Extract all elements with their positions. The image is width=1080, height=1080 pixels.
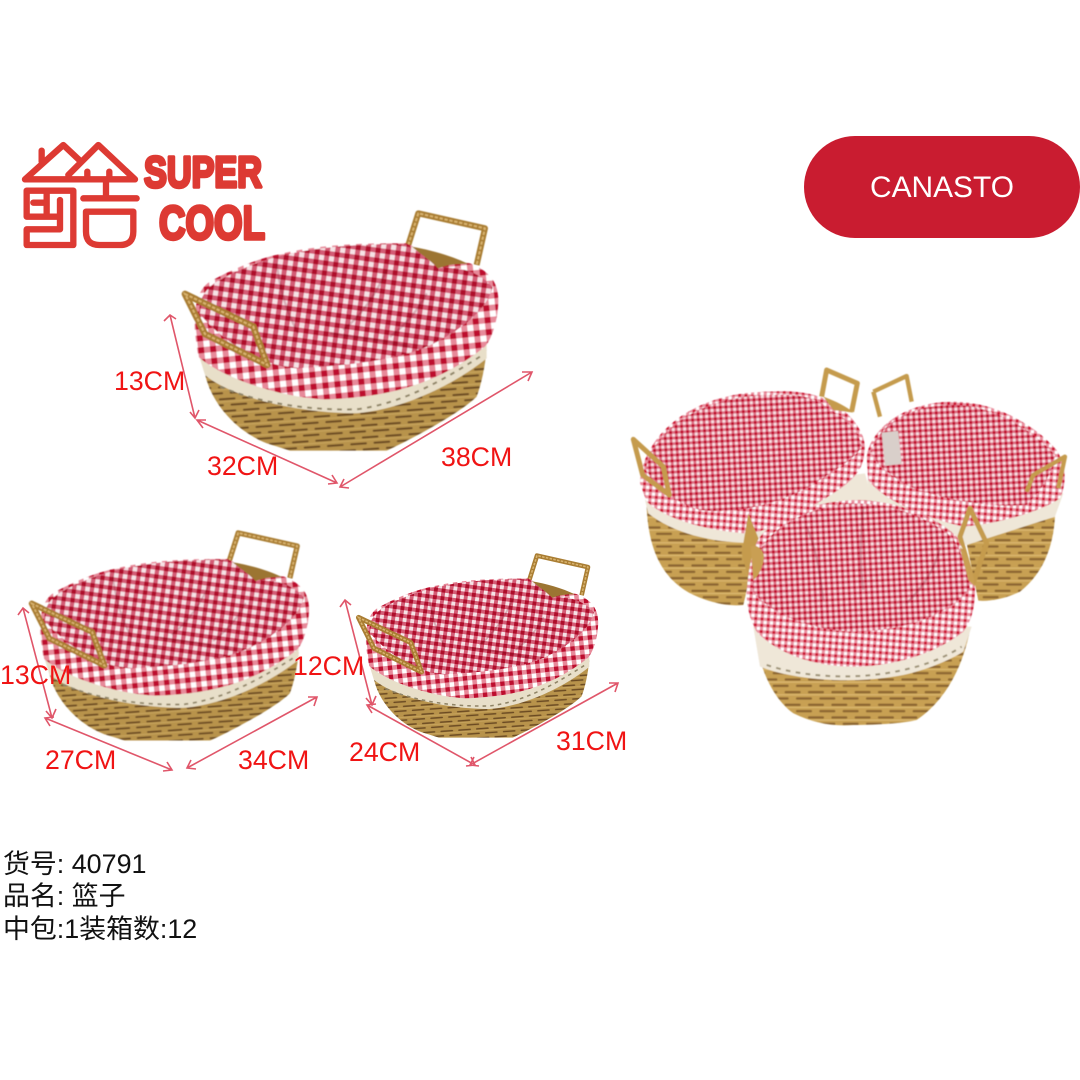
label: 24CM: 24CM (349, 737, 420, 767)
back right basket (867, 376, 1065, 601)
label: 38CM: 38CM (441, 442, 512, 472)
front basket (742, 500, 987, 725)
label: 13CM: 13CM (0, 660, 71, 690)
logo wordmark: COOL: COOL (159, 196, 265, 249)
logo: Super Cool (25, 145, 265, 249)
back left basket (633, 370, 877, 605)
item number: 货号: 40791 (3, 849, 146, 879)
logo icon: house mark (25, 145, 137, 245)
packing: 中包:1装箱数:12 (3, 914, 197, 944)
label: 27CM: 27CM (45, 745, 116, 775)
badge: CANASTO (804, 136, 1080, 238)
product photo: medium basket (32, 533, 309, 741)
label: 32CM: 32CM (207, 451, 278, 481)
dimension arrows: medium basket (18, 608, 317, 771)
badge: CANASTO: CANASTO (870, 171, 1014, 204)
label: 13CM: 13CM (114, 366, 185, 396)
logo wordmark: SUPER: SUPER (144, 148, 262, 197)
label: 34CM: 34CM (238, 745, 309, 775)
product photo: nested set of three baskets (633, 370, 1065, 725)
dimension arrows: large basket (164, 315, 532, 488)
product info text (3, 849, 197, 944)
product name: 品名: 篮子 (3, 881, 126, 911)
label: 31CM: 31CM (556, 726, 627, 756)
dimension arrows: small basket (340, 600, 618, 766)
label: 12CM: 12CM (293, 651, 364, 681)
product photo: large basket (185, 213, 498, 451)
product photo: small basket (359, 556, 598, 738)
